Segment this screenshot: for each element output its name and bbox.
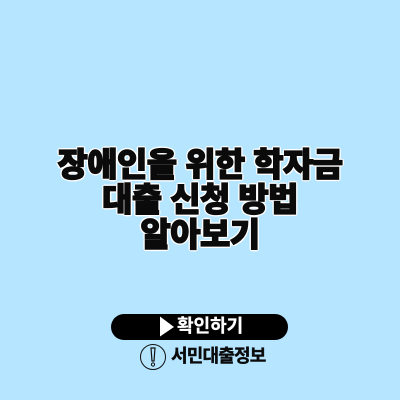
title: 장애인을 위한 학자금 (58, 146, 342, 183)
brand name: 서민대출정보 (171, 346, 266, 366)
title: 대출 신청 방법 (102, 181, 298, 218)
button label: 확인하기 (177, 316, 243, 336)
title (56, 146, 344, 253)
icon: exclamation circle (140, 344, 166, 370)
button: confirm (111, 314, 288, 340)
icon: play triangle (160, 316, 174, 336)
title: 알아보기 (140, 216, 260, 253)
